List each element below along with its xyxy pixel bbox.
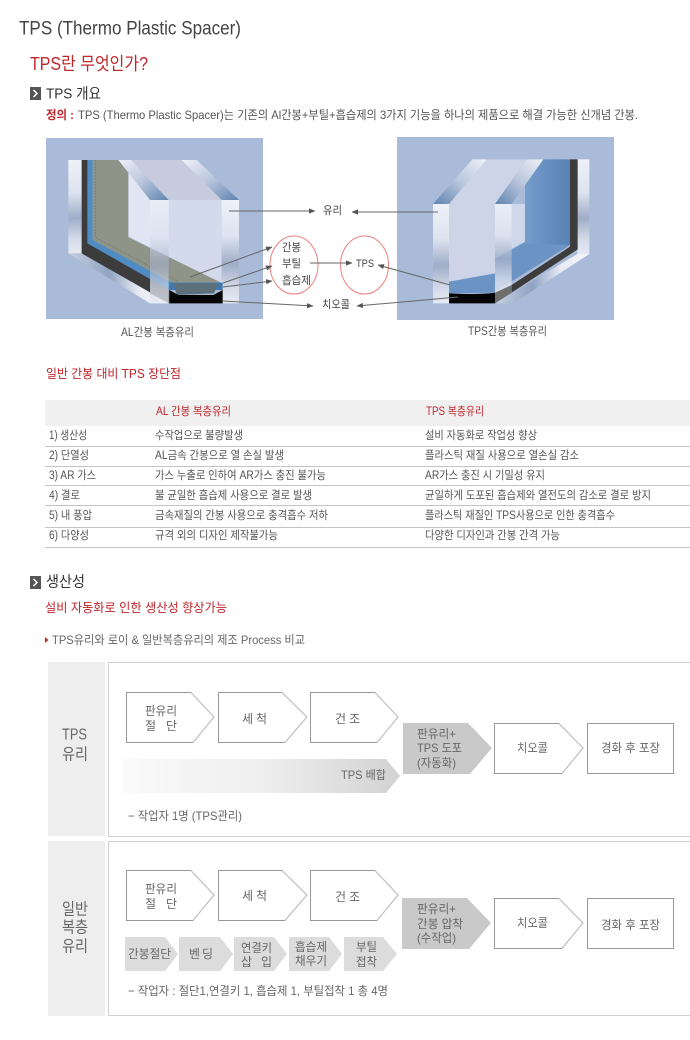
worker note: − 작업자 : 절단1,연결키 1, 흡습제 1, 부틸접착 1 총 4명 xyxy=(128,984,388,998)
label: regular insulated glass xyxy=(62,900,88,956)
section heading: productivity: 생산성 xyxy=(46,574,85,590)
step: desiccant filling xyxy=(289,937,342,971)
label: regular insulated glass: 유리 xyxy=(62,938,88,956)
diagram labels: AL간봉 복층유리 xyxy=(121,326,194,339)
diagram labels: TPS xyxy=(356,258,374,270)
row: insulation: 플라스틱 재질 사용으로 열손실 감소 xyxy=(425,449,579,462)
row: AR gas: 가스 누출로 인하여 AR가스 충진 불가능 xyxy=(155,468,326,482)
title: TPS (Thermo Plastic Spacer) xyxy=(19,18,241,40)
step: curing and packing: 경화 후 포장 xyxy=(601,741,660,755)
definition text: TPS (Thermo Plastic Spacer)는 기존의 Al간봉+부틸+흡습제의 3가지 기능을 하나의 제품으로 해결 가능한 신개념 간봉. xyxy=(78,108,638,122)
step: glass cutting xyxy=(126,692,214,742)
step: washing: 척 xyxy=(256,712,267,726)
step: TPS coating: 판유리+ xyxy=(417,727,456,741)
row: condensation: 균일하게 도포된 흡습제와 열전도의 감소로 결로 방지 xyxy=(425,488,651,502)
step: washing: 척 xyxy=(256,889,267,903)
comparison table: TPS 복층유리 xyxy=(426,405,484,418)
row: AR gas: 3) AR 가스 xyxy=(49,469,96,482)
row: wind pressure: 금속재질의 간봉 사용으로 충격흡수 저하 xyxy=(155,508,328,522)
row: productivity: 1) 생산성 xyxy=(49,429,87,442)
step: curing and packing xyxy=(588,898,674,948)
row: AR gas: AR가스 충진 시 기밀성 유지 xyxy=(425,469,545,482)
step: drying: 건 xyxy=(335,712,346,726)
diagram labels: 유리 xyxy=(323,204,342,217)
step: connector insertion: 삽 xyxy=(241,955,252,969)
row: wind pressure: 플라스틱 재질인 TPS사용으로 인한 충격흡수 xyxy=(425,508,615,522)
callout ellipse: AL spacer parts xyxy=(270,236,318,294)
section heading: productivity xyxy=(30,574,85,590)
worker note: − 작업자 1명 (TPS관리) xyxy=(128,809,242,823)
step: spacer pressing: 판유리+ xyxy=(417,902,456,916)
step: thiokol xyxy=(494,898,583,948)
row: wind pressure: 5) 내 풍압 xyxy=(49,509,92,522)
row: AR gas xyxy=(49,468,545,482)
subheading: productivity improvement: 설비 자동화로 인한 생산성 향상가능 xyxy=(45,601,227,615)
step: TPS coating xyxy=(403,723,492,774)
step: drying xyxy=(310,870,398,920)
step: desiccant filling: 흡습제 xyxy=(295,940,327,954)
panel: regular insulated glass process xyxy=(48,841,690,1016)
callout ellipse: TPS xyxy=(340,236,388,294)
arrows: diagram leaders xyxy=(190,211,458,306)
row: diversity: 다양한 디자인과 간봉 간격 가능 xyxy=(425,528,560,542)
step: TPS coating: TPS 도포 xyxy=(417,741,462,755)
section heading: TPS overview: TPS 개요 xyxy=(46,86,101,102)
step: butyl bonding xyxy=(344,937,397,971)
step: connector insertion: 입 xyxy=(261,955,272,969)
label: TPS glass: TPS xyxy=(62,726,87,744)
step: washing xyxy=(218,692,307,742)
row: condensation: 4) 결로 xyxy=(49,489,80,502)
row: condensation xyxy=(49,488,651,502)
step: glass cutting: 판유리 xyxy=(145,882,177,896)
step: spacer pressing: 간봉 압착 xyxy=(417,917,463,931)
heading: what is TPS: TPS란 무엇인가? xyxy=(30,54,148,74)
step: spacer pressing xyxy=(402,898,491,949)
step: thiokol: 치오콜 xyxy=(517,741,548,755)
diagram: AL spacer glass xyxy=(46,138,263,319)
row: condensation: 불 균일한 흡습제 사용으로 결로 발생 xyxy=(155,488,312,502)
comparison table: AL 간봉 복층유리 xyxy=(156,405,231,418)
step: TPS coating: (자동화) xyxy=(417,756,456,770)
step: curing and packing: 경화 후 포장 xyxy=(601,918,660,932)
step: bending xyxy=(179,937,233,971)
row: insulation xyxy=(49,449,579,462)
step: butyl bonding: 접착 xyxy=(356,955,377,969)
row: productivity xyxy=(49,429,537,442)
diagram labels xyxy=(121,204,547,339)
step: glass cutting: 단 xyxy=(166,719,177,733)
step: bending: 벤 xyxy=(189,947,200,961)
row: insulation: 2) 단열성 xyxy=(49,449,89,462)
step: drying xyxy=(310,692,398,742)
row: productivity: 수작업으로 불량발생 xyxy=(155,429,243,442)
diagram labels: 부틸 xyxy=(282,257,301,270)
row: wind pressure xyxy=(49,508,615,522)
label: regular insulated glass: 복층 xyxy=(62,918,88,936)
step: butyl bonding: 부틸 xyxy=(356,940,377,954)
step: connector insertion: 연결키 xyxy=(241,941,272,955)
step: spacer cutting xyxy=(125,937,178,971)
step: bending: 딩 xyxy=(202,947,213,961)
step: glass cutting: 판유리 xyxy=(145,704,177,718)
row: diversity: 규격 외의 디자인 제작불가능 xyxy=(155,528,278,542)
process comparison caption: TPS유리와 로이 & 일반복층유리의 제조 Process 비교 xyxy=(52,633,305,647)
heading: comparison table: 일반 간봉 대비 TPS 장단점 xyxy=(46,367,181,381)
step: spacer cutting: 간봉절단 xyxy=(128,947,171,961)
step: TPS mixing: TPS 배합 xyxy=(341,768,386,782)
step: thiokol xyxy=(494,724,583,774)
label: TPS glass: 유리 xyxy=(62,746,88,764)
diagram labels: TPS간봉 복층유리 xyxy=(468,325,547,338)
label: regular insulated glass: 일반 xyxy=(62,900,88,918)
step: drying: 조 xyxy=(349,890,360,904)
step: curing and packing xyxy=(588,724,674,774)
row: diversity xyxy=(49,528,560,542)
row: diversity: 6) 다양성 xyxy=(49,529,89,542)
step: drying: 조 xyxy=(349,712,360,726)
diagram labels: 치오콜 xyxy=(322,298,350,311)
step: washing xyxy=(218,870,307,920)
step: drying: 건 xyxy=(335,890,346,904)
step: glass cutting: 절 xyxy=(145,719,156,733)
step: glass cutting: 절 xyxy=(145,897,156,911)
step: glass cutting xyxy=(126,870,214,920)
step: thiokol: 치오콜 xyxy=(517,916,548,930)
diagram labels: 간봉 xyxy=(282,241,301,254)
definition text: 정의 : xyxy=(46,108,74,122)
step: spacer pressing: (수작업) xyxy=(417,931,456,945)
row: insulation: AL금속 간봉으로 열 손실 발생 xyxy=(155,449,284,462)
step: washing: 세 xyxy=(242,712,253,726)
panel: TPS glass process xyxy=(48,662,690,836)
comparison table xyxy=(45,400,690,548)
step: connector insertion xyxy=(234,937,287,971)
diagram: TPS spacer glass xyxy=(397,137,614,320)
step: desiccant filling: 채우기 xyxy=(295,954,327,968)
row: productivity: 설비 자동화로 작업성 향상 xyxy=(425,429,537,442)
step: glass cutting: 단 xyxy=(166,897,177,911)
diagram labels: 흡습제 xyxy=(282,273,311,287)
step: TPS mixing xyxy=(122,759,400,793)
step: washing: 세 xyxy=(242,889,253,903)
label: TPS glass xyxy=(62,726,88,764)
